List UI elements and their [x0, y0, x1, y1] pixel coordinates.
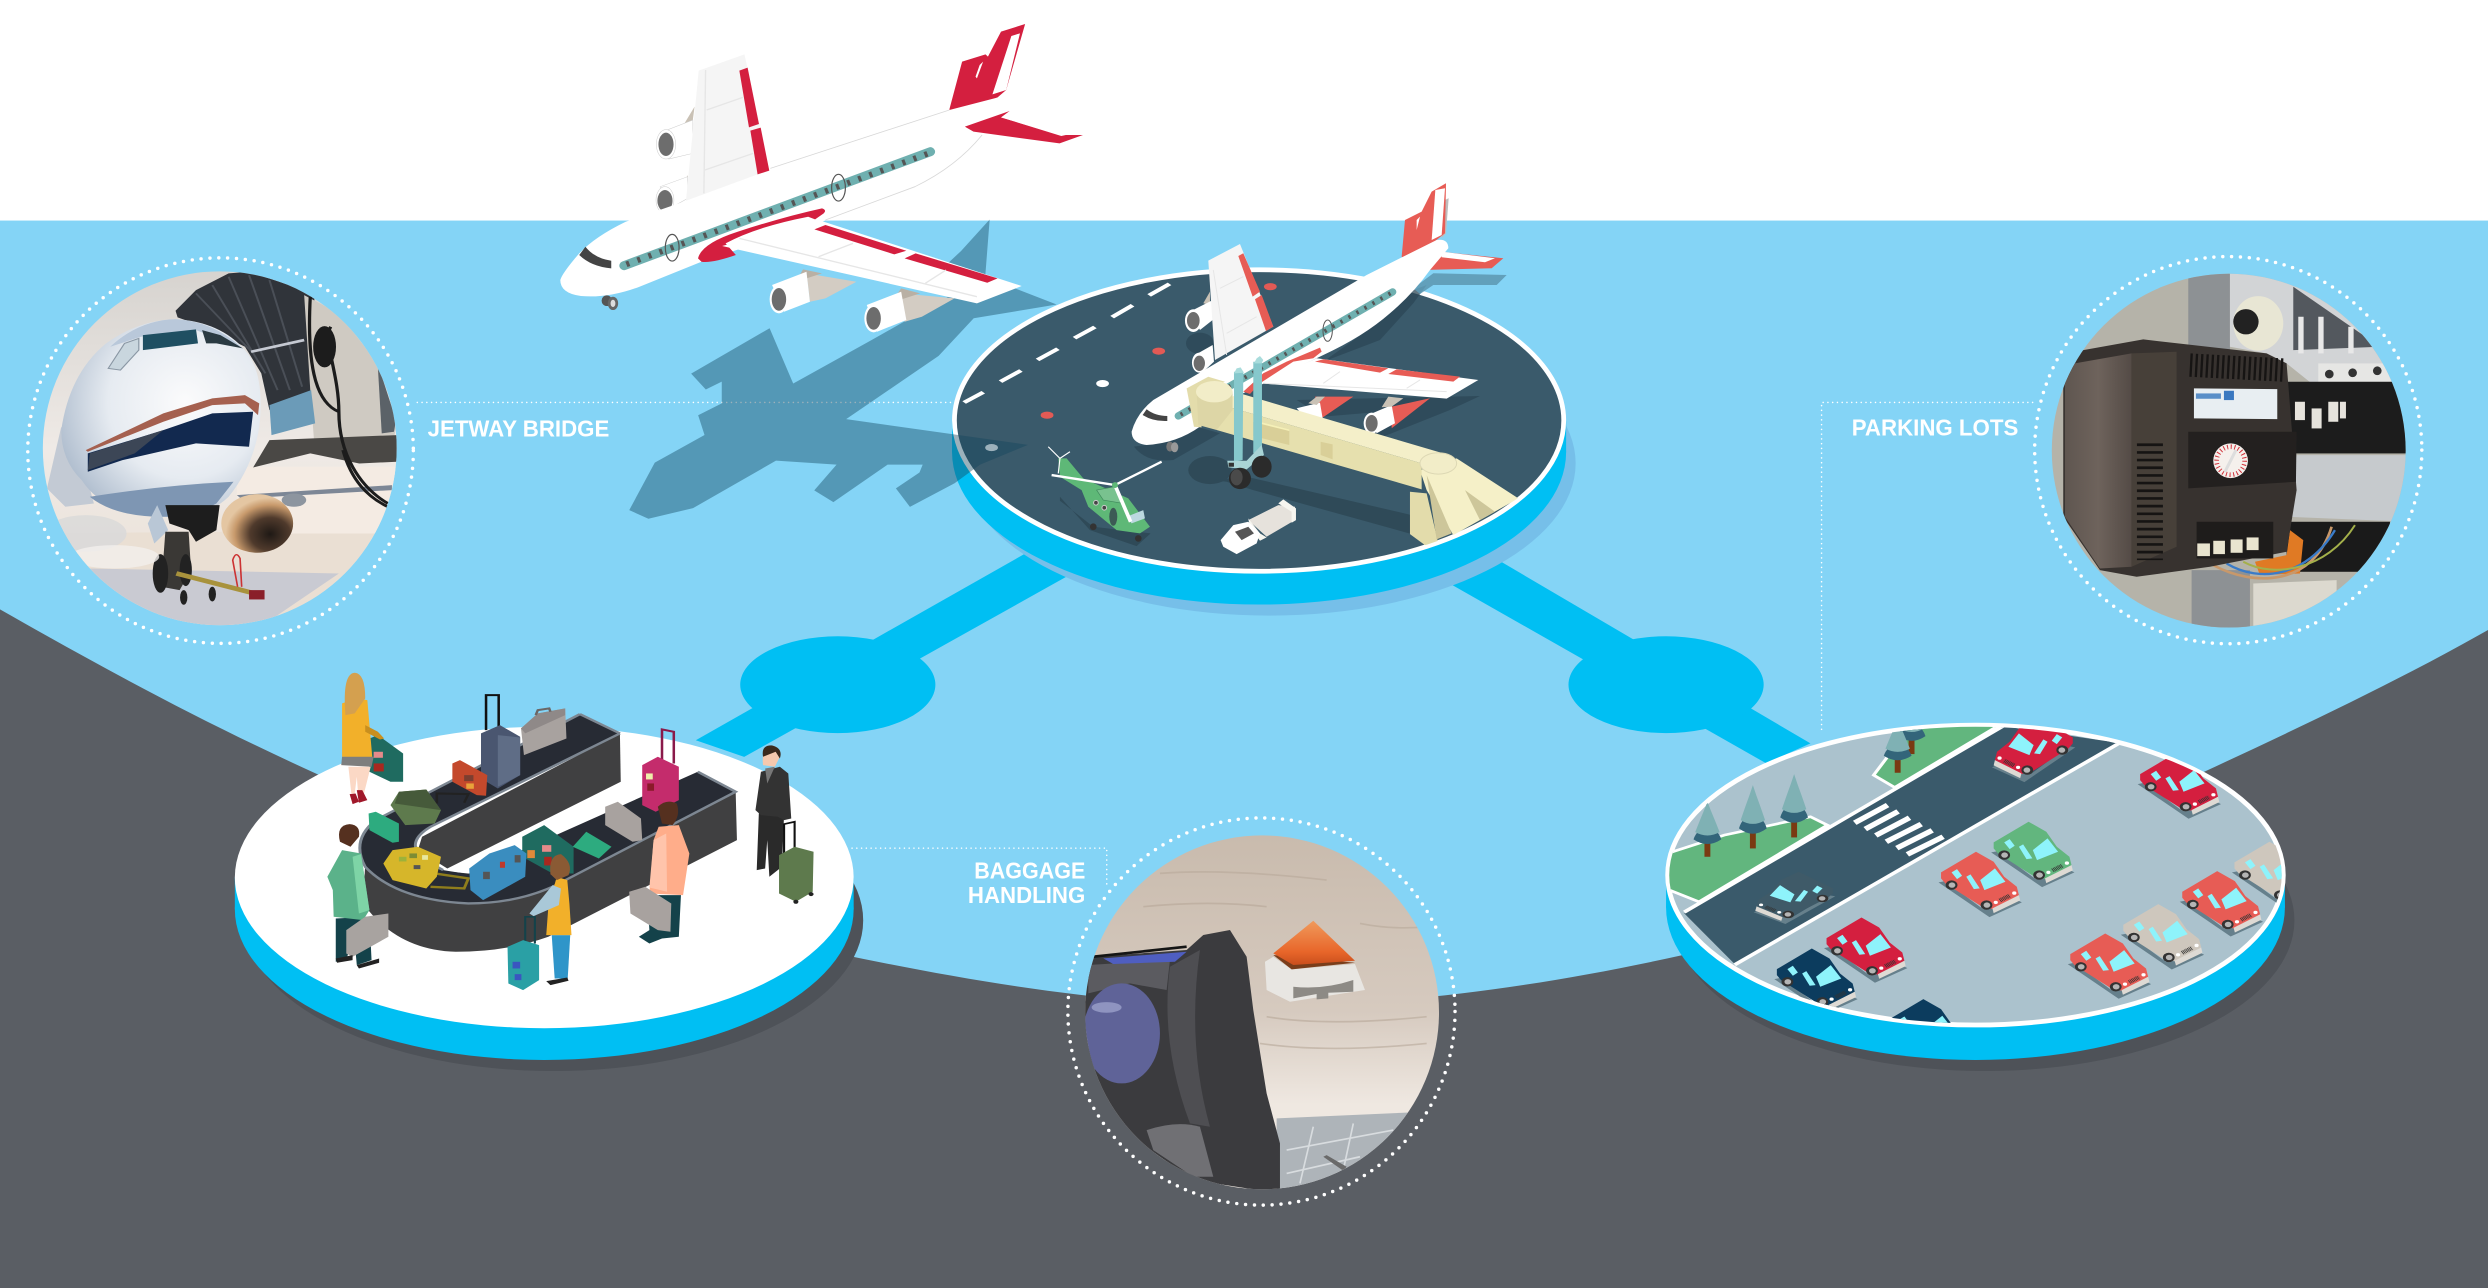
- jetway wheels: [1229, 456, 1272, 489]
- parked plane: tail: [1402, 183, 1449, 263]
- car: red parked: [1824, 917, 1907, 983]
- car: green parked: [1991, 822, 2074, 887]
- man in peach with grey case: [629, 802, 689, 943]
- carousel conveyor: [360, 714, 737, 952]
- flying airplane: [560, 24, 1083, 332]
- baggage carousel scene: [327, 673, 814, 990]
- jetway bridge illustration: [1187, 356, 1518, 545]
- flying plane: near engines: [770, 269, 955, 332]
- parking lot and road scene: [1661, 697, 2315, 1064]
- runway markings: [964, 283, 1277, 451]
- leader line: parking lots: [1822, 402, 2033, 733]
- road: [1684, 725, 2120, 965]
- flying plane: tail: [949, 24, 1025, 118]
- jetway shadow: [1188, 456, 1412, 534]
- dotted ring: panel photo: [2035, 257, 2422, 644]
- dotted ring: floor photo: [1068, 818, 1455, 1205]
- businessman with green roller: [755, 745, 814, 904]
- car: red on road: [1992, 728, 2075, 782]
- label: jetway bridge: JETWAY BRIDGE: [428, 415, 609, 441]
- jetway rotunda near end: [1187, 377, 1457, 474]
- man in green with grey case: [327, 824, 388, 968]
- flying plane: fuselage: [560, 96, 1013, 310]
- connector: runway to baggage: [696, 514, 1133, 757]
- shadows on runway: [1134, 273, 1507, 461]
- luggage on belt: [369, 695, 679, 900]
- photo: aircraft at jetway: [42, 271, 397, 626]
- background: dark grey ground curve: [0, 609, 2488, 1288]
- parked plane: near wing: [1243, 348, 1478, 399]
- jetway tunnel: [1217, 393, 1443, 489]
- panel: runway platform: [952, 270, 1576, 616]
- flying plane: stabilizer: [965, 111, 1083, 143]
- woman in yellow with case: [341, 673, 403, 804]
- woman with teal roller: [508, 854, 572, 990]
- jetway rotunda far end and fan: [1410, 458, 1518, 545]
- grass patches: [1661, 720, 2002, 902]
- label: baggage handling: BAGGAGE: [974, 857, 1085, 883]
- jetway supports: [1227, 356, 1264, 469]
- car: coral parked right: [2180, 871, 2263, 936]
- car: dark teal on road: [1754, 885, 1835, 924]
- car: navy at bottom edge: [1892, 999, 1951, 1023]
- leader line: jetway bridge: [417, 401, 952, 403]
- parked airplane: [1132, 183, 1503, 452]
- connector: runway to parking: [1380, 519, 1810, 763]
- car: beige at edge: [2232, 842, 2282, 903]
- car: red at top edge: [2138, 753, 2221, 819]
- flying plane: near wing: [698, 208, 1022, 303]
- panel: parking platform: [1666, 725, 2294, 1071]
- leader line: baggage handling: [852, 848, 1107, 889]
- parked plane: near engines: [1297, 397, 1430, 434]
- panel: baggage platform: [235, 727, 863, 1071]
- label: baggage handling: [968, 857, 1085, 908]
- shadow of flying plane: [629, 219, 1057, 519]
- label: baggage handling: HANDLING: [968, 882, 1085, 908]
- parked plane: far wing: [1208, 244, 1273, 360]
- baggage truck: [1221, 499, 1296, 554]
- parked plane: stabilizer: [1415, 252, 1503, 270]
- parked plane: fuselage: [1132, 240, 1448, 452]
- car: beige parked: [2121, 904, 2204, 969]
- car: coral parked lower right: [2068, 933, 2151, 999]
- dotted ring: jetway photo: [28, 258, 413, 643]
- flying plane: far engines: [656, 107, 695, 213]
- flying plane: far wing: [686, 54, 769, 201]
- car: navy parked: [1774, 948, 1858, 1014]
- helicopter: [1048, 447, 1162, 546]
- car: coral parked: [1939, 852, 2022, 917]
- photo: beacon and bag on floor: [1079, 825, 1447, 1198]
- trees: [1694, 697, 1925, 857]
- parked plane: far engines: [1185, 292, 1214, 373]
- background: white sky: [0, 0, 2488, 222]
- label: parking lots: PARKING LOTS: [1852, 415, 2018, 441]
- crosswalk: [1855, 805, 1943, 854]
- photo: electrical heater panel: [2047, 270, 2412, 635]
